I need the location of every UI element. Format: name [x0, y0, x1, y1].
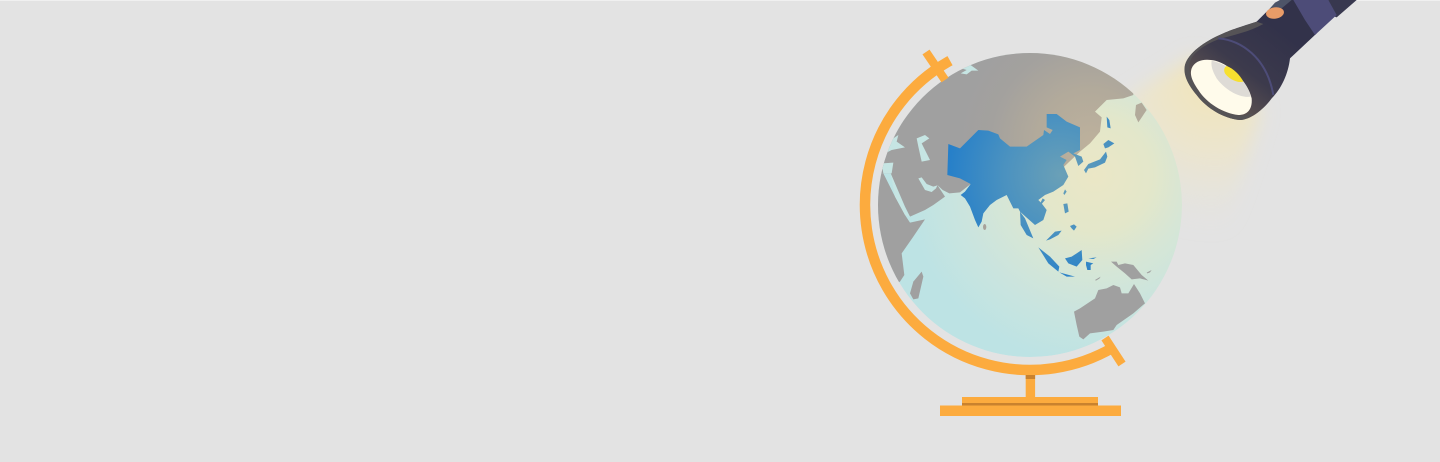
flashlight band [1293, 0, 1337, 35]
land: Eurasia and Middle East [881, 53, 1134, 216]
land: Madagascar [910, 272, 923, 299]
map: continents [878, 53, 1152, 340]
top pivot [926, 52, 945, 80]
stem [1026, 375, 1035, 398]
highlighted region: China, India, Southeast Asia [947, 114, 1114, 277]
ocean [884, 94, 1182, 357]
land: Australia [1074, 284, 1145, 339]
flashlight tail [1327, 0, 1357, 17]
upper base [962, 397, 1098, 404]
light beam [1105, 55, 1262, 235]
land: Sri Lanka [983, 224, 986, 230]
flashlight head [1185, 0, 1317, 120]
flashlight clip [1270, 0, 1292, 8]
flashlight ridge [1218, 38, 1273, 95]
land: Kamchatka [1135, 103, 1147, 122]
globe stand [805, 0, 1255, 430]
flashlight rim [1184, 22, 1263, 120]
meridian ring [805, 0, 1255, 430]
land: Africa [878, 174, 925, 282]
bottom pivot [1105, 338, 1122, 364]
base shadow [962, 403, 1098, 406]
seas: Caspian, Black Sea, Persian Gulf, Arctic [880, 63, 978, 217]
flashlight button [1265, 6, 1285, 20]
lower base [940, 406, 1121, 416]
flashlight reflector [1211, 61, 1251, 97]
flashlight lens [1191, 60, 1252, 115]
flashlight bulb [1224, 66, 1243, 82]
land: New Guinea and small islands [1095, 262, 1152, 281]
flashlight [1184, 0, 1357, 120]
stem shadow [1026, 375, 1035, 379]
globe [878, 53, 1182, 357]
